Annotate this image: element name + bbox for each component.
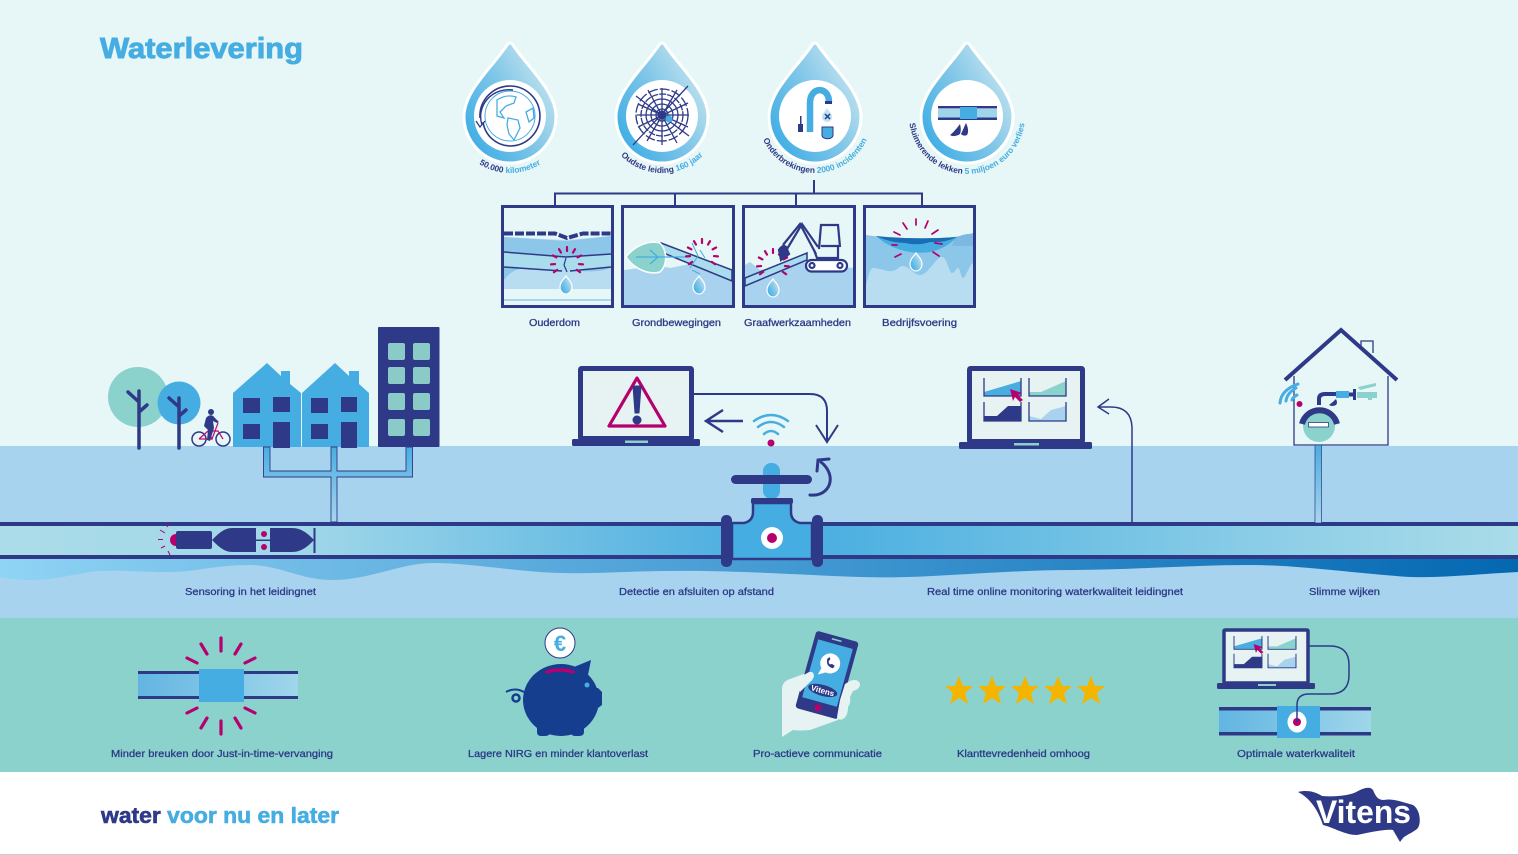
curved label: Sluimerende lekken 5 miljoen euro verlies xyxy=(910,123,1024,174)
labels: measures: Slimme wijken xyxy=(1309,586,1380,598)
icon: leaking pipe xyxy=(938,106,997,136)
trees xyxy=(108,367,200,448)
drop: oudste leiding xyxy=(614,42,710,174)
icon: wifi xyxy=(1280,384,1302,407)
houses xyxy=(233,363,369,448)
tagline: water voor nu en later xyxy=(100,803,339,828)
curved label: 50.000 kilometer xyxy=(480,159,540,173)
label: Lagere NIRG en minder klantoverlast xyxy=(468,748,648,760)
arrow: laptop to valve xyxy=(693,394,838,442)
labels: measures xyxy=(185,586,1380,598)
labels: causes: Ouderdom xyxy=(529,317,580,329)
benefit: proactive communication xyxy=(753,631,882,760)
footer band xyxy=(0,772,1518,855)
labels: causes: Bedrijfsvoering xyxy=(882,317,957,329)
apartment building xyxy=(378,327,440,447)
arrow: signal to laptop xyxy=(706,410,743,432)
label: Minder breuken door Just-in-time-vervanging xyxy=(111,748,333,760)
benefit: water quality xyxy=(1217,630,1371,760)
laptop: warning xyxy=(572,368,700,446)
icon: wifi xyxy=(754,415,788,446)
curved label: Onderbrekingen 2000 incidenten xyxy=(764,138,867,174)
benefit: customer satisfaction xyxy=(945,676,1105,760)
sky background xyxy=(0,0,1518,447)
labels: measures: Sensoring in het leidingnet xyxy=(185,586,316,598)
excavator xyxy=(779,224,847,272)
leaf xyxy=(626,242,666,273)
valve xyxy=(721,459,830,567)
icon: tap xyxy=(798,90,833,139)
icon: globe xyxy=(476,86,540,146)
arrow: pipe to laptop xyxy=(1098,399,1132,523)
drop: sluimerende lekken xyxy=(910,42,1024,174)
laptop: monitoring xyxy=(959,368,1092,449)
label: Pro-actieve communicatie xyxy=(753,748,882,760)
icon: warning triangle xyxy=(609,378,665,426)
cyclist xyxy=(192,409,230,446)
benefit: piggy bank: € xyxy=(554,631,566,656)
panel: Bedrijfsvoering xyxy=(864,206,974,306)
inspection robot xyxy=(158,523,316,555)
service pipes xyxy=(264,447,412,522)
pipe xyxy=(661,243,732,281)
labels: measures: Real time online monitoring waterkwaliteit leidingnet xyxy=(927,586,1183,598)
labels: measures: Detectie en afsluiten op afstand xyxy=(619,586,774,598)
pipe xyxy=(504,252,611,271)
benefit: piggy bank xyxy=(468,628,648,760)
labels: causes xyxy=(529,317,957,329)
labels: causes: Graafwerkzaamheden xyxy=(744,317,851,329)
benefit: proactive communication: Vitens xyxy=(810,683,836,699)
benefit: fewer breaks xyxy=(111,638,333,760)
water under main xyxy=(0,556,1518,580)
smart house xyxy=(1280,330,1397,523)
pipe xyxy=(745,253,807,286)
labels: causes: Grondbewegingen xyxy=(632,317,721,329)
panel: Ouderdom xyxy=(502,206,612,306)
panel: Graafwerkzaamheden xyxy=(744,206,854,306)
benefits band xyxy=(0,618,1518,773)
label: Klanttevredenheid omhoog xyxy=(957,748,1090,760)
charts xyxy=(984,378,1066,421)
main pipe xyxy=(0,522,1518,559)
ground xyxy=(0,446,1518,619)
title: Waterlevering xyxy=(100,33,303,65)
panel: Grondbewegingen xyxy=(622,206,734,306)
connector tree xyxy=(555,180,922,206)
curved label: Oudste leiding 160 jaar xyxy=(622,152,702,174)
label: Optimale waterkwaliteit xyxy=(1237,748,1355,760)
logo: Vitens xyxy=(1298,788,1420,842)
logo: Vitens: Vitens xyxy=(1316,794,1411,830)
drop: onderbrekingen xyxy=(764,42,867,174)
drop: 50.000 kilometer xyxy=(462,42,558,173)
icon: spider web xyxy=(633,86,689,145)
